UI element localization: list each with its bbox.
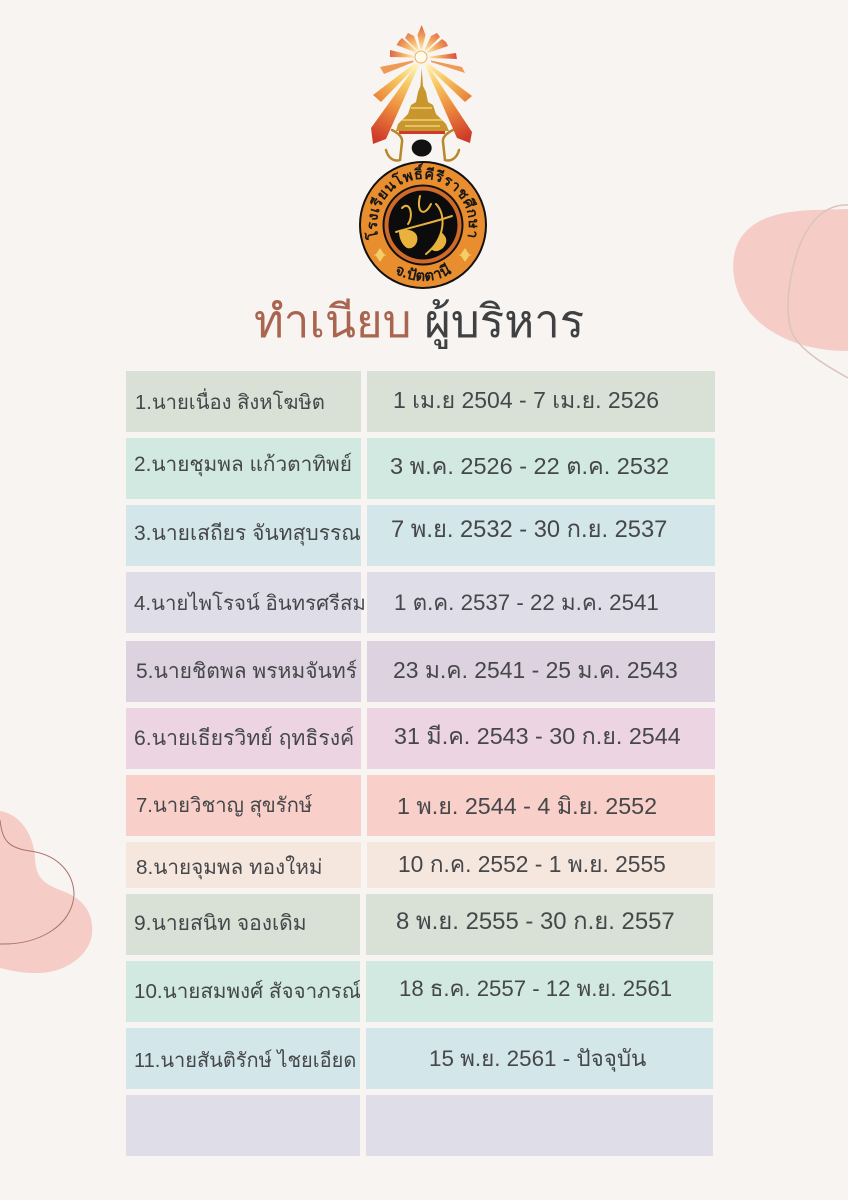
row 11 xyxy=(126,1028,713,1089)
row 3 xyxy=(126,505,715,566)
row 2 xyxy=(126,438,715,499)
row 3: 7 พ.ย. 2532 - 30 ก.ย. 2537 xyxy=(391,517,667,543)
row 6: 6.นายเธียรวิทย์ ฤทธิรงค์ xyxy=(134,727,354,750)
naga ornaments xyxy=(386,130,459,161)
school emblem logo xyxy=(359,25,487,289)
row 8: 8.นายจุมพล ทองใหม่ xyxy=(136,856,322,879)
row 10: 18 ธ.ค. 2557 - 12 พ.ย. 2561 xyxy=(399,976,672,1001)
row 8: 10 ก.ค. 2552 - 1 พ.ย. 2555 xyxy=(398,851,666,877)
row 7: 1 พ.ย. 2544 - 4 มิ.ย. 2552 xyxy=(397,793,657,819)
row 7: 7.นายวิชาญ สุขรักษ์ xyxy=(136,795,312,817)
row 5: 23 ม.ค. 2541 - 25 ม.ค. 2543 xyxy=(393,657,678,683)
ornaments xyxy=(374,249,386,261)
row 1: 1.นายเนื่อง สิงหโฆษิต xyxy=(135,392,325,414)
black orb xyxy=(412,140,432,156)
row 9: 9.นายสนิท จองเดิม xyxy=(134,912,307,935)
row 9: 8 พ.ย. 2555 - 30 ก.ย. 2557 xyxy=(396,908,675,935)
row 1 xyxy=(126,371,715,432)
row 11: 11.นายสันติรักษ์ ไชยเอียด xyxy=(134,1050,356,1072)
row 6: 31 มี.ค. 2543 - 30 ก.ย. 2544 xyxy=(394,723,681,749)
row 9 xyxy=(126,894,713,955)
row 10 xyxy=(126,961,713,1022)
row 4 xyxy=(126,572,715,633)
rays xyxy=(371,25,472,144)
golden spire xyxy=(396,68,449,131)
row 2: 2.นายชุมพล แก้วตาทิพย์ xyxy=(134,453,352,476)
seal xyxy=(359,161,487,289)
row 4: 1 ต.ค. 2537 - 22 ม.ค. 2541 xyxy=(394,590,659,615)
row 5 xyxy=(126,641,715,702)
row 1: 1 เม.ย 2504 - 7 เม.ย. 2526 xyxy=(393,387,659,413)
row 8 xyxy=(126,842,715,888)
title: ทำเนียบ ผู้บริหาร xyxy=(254,296,584,347)
seal monogram xyxy=(396,196,452,254)
school emblem logo: จ.ปัตตานี xyxy=(396,262,452,282)
row 5: 5.นายชิตพล พรหมจันทร์ xyxy=(136,660,357,683)
sun circle xyxy=(415,51,427,63)
row 11: 15 พ.ย. 2561 - ปัจจุบัน xyxy=(429,1046,646,1071)
row 6 xyxy=(126,708,715,769)
row 4: 4.นายไพโรจน์ อินทรศรีสม xyxy=(134,593,366,615)
seal text: โรงเรียนโพธิ์คีรีราชศึกษา xyxy=(364,163,478,240)
row 10: 10.นายสมพงศ์ สัจจาภรณ์ xyxy=(134,980,361,1003)
row 3: 3.นายเสถียร จันทสุบรรณ xyxy=(134,522,361,545)
row 12: empty xyxy=(126,1095,713,1156)
row 2: 3 พ.ค. 2526 - 22 ต.ค. 2532 xyxy=(390,453,669,479)
table of administrators xyxy=(126,371,715,1156)
row 7 xyxy=(126,775,715,836)
